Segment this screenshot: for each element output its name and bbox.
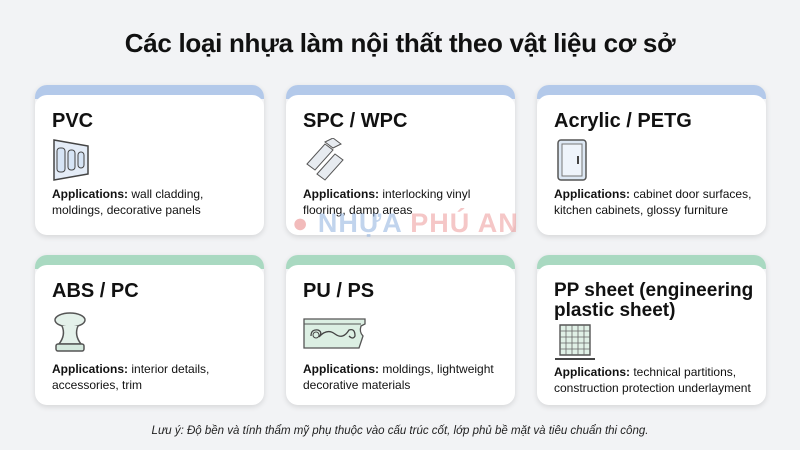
panel: PU / PS <box>286 255 515 405</box>
icon: PVC panel <box>53 139 89 181</box>
text: applications: Applications: moldings, lightweight decorative materials <box>303 362 494 392</box>
panel: PP sheet <box>537 255 766 405</box>
text: applications: Applications: interior details, accessories, trim <box>52 362 209 392</box>
watermark: ● NHỰA PHÚ AN <box>292 208 519 238</box>
panel: ABS / PC <box>35 255 264 405</box>
panel: SPC / WPC <box>286 85 515 235</box>
heading: Acrylic / PETG: Acrylic / PETG <box>554 110 692 132</box>
panel: PVC <box>35 85 264 235</box>
icon: vinyl planks <box>306 138 344 181</box>
icon: decorative molding <box>303 318 366 349</box>
heading: PVC: PVC <box>52 110 93 132</box>
icon: knob <box>54 312 86 352</box>
icon: glossy cabinet door <box>557 139 587 181</box>
icon: grid sheet <box>555 324 595 360</box>
text: applications: Applications: interlocking vinyl flooring, damp areas <box>303 187 470 216</box>
heading: ABS / PC: ABS / PC <box>52 280 139 302</box>
title: Các loại nhựa làm nội thất theo vật liệu cơ sở <box>125 28 675 58</box>
heading: PP sheet: PP sheet (engineering plastic sheet) <box>554 280 753 321</box>
text: applications: Applications: technical partitions, construction protection underlayment <box>554 365 751 394</box>
heading: PU / PS: PU / PS <box>303 280 374 302</box>
footnote: Lưu ý: Độ bền và tính thẩm mỹ phụ thuộc vào cấu trúc cốt, lớp phủ bề mặt và tiêu chuẩn thi công. <box>152 425 648 437</box>
panel: Acrylic / PETG <box>537 85 766 235</box>
text: applications: Applications: cabinet door surfaces, kitchen cabinets, glossy furniture <box>554 187 751 216</box>
heading: SPC / WPC: SPC / WPC <box>303 110 407 132</box>
text: applications: Applications: wall cladding, moldings, decorative panels <box>52 187 203 216</box>
